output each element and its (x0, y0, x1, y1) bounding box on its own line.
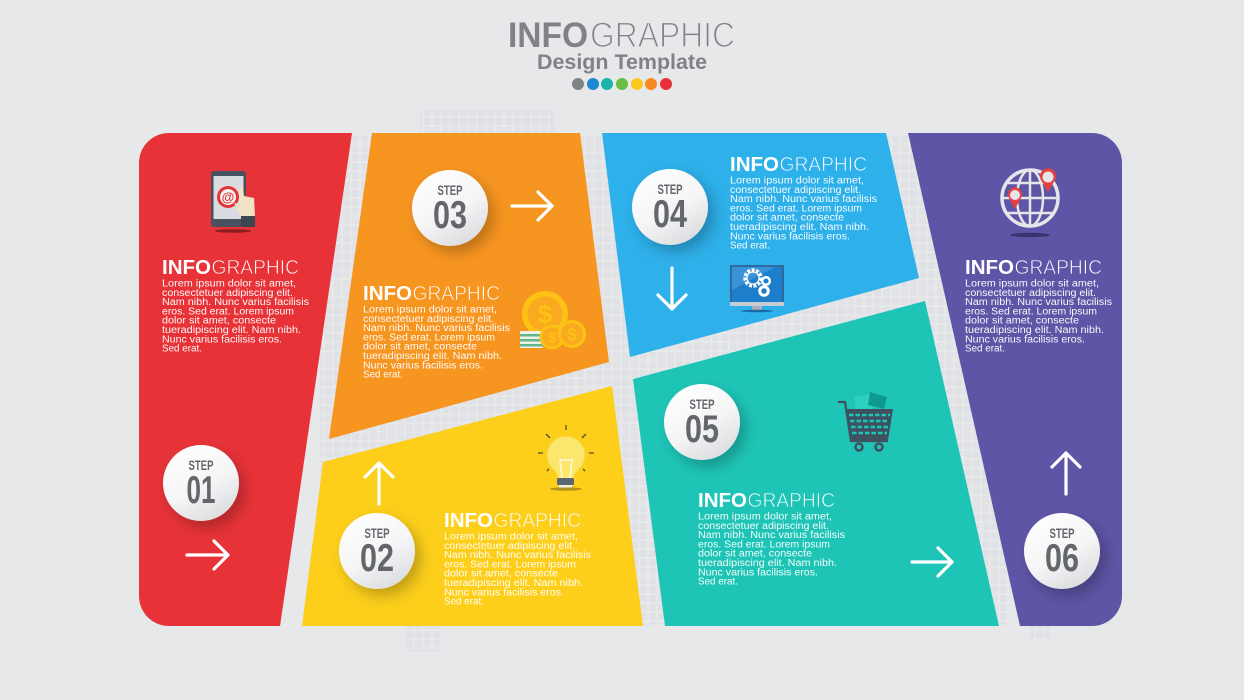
text block: INFO (162, 257, 211, 279)
text block: Sed erat. (363, 370, 403, 381)
icon: tablet with hand (211, 171, 255, 233)
text block: INFO (698, 490, 747, 512)
panel: step 1 red (139, 133, 352, 626)
text block: consectetuer adipiscing elit. (444, 541, 575, 552)
text block: Lorem ipsum dolor sit amet, (698, 512, 832, 522)
text block: dolor sit amet, consecte (698, 549, 812, 560)
text block: GRAPHIC (1014, 257, 1102, 279)
text block: tueradipiscing elit. Nam nibh. (965, 325, 1104, 336)
text block: consectetuer adipiscing elit. (730, 185, 861, 196)
panel: step 5 teal (633, 301, 999, 626)
arrow up (365, 463, 393, 504)
icon: monitor with gears (730, 265, 784, 312)
panel: step 4 blue (602, 133, 919, 357)
text block (363, 283, 510, 381)
text block: eros. Sed erat. Lorem ipsum (965, 306, 1097, 317)
icon: coins and cash: $ (538, 299, 553, 329)
text block: Lorem ipsum dolor sit amet, (363, 304, 497, 316)
panel: step 3 orange (329, 133, 609, 439)
text block: dolor sit amet, consecte (730, 213, 844, 224)
step badge 04: STEP (658, 181, 682, 197)
text block: Nunc varius facilisis eros. (698, 567, 818, 578)
text block: consectetuer adipiscing elit. (698, 521, 829, 532)
icon: shopping cart (838, 392, 893, 450)
text block: INFO (444, 510, 493, 532)
icon: coins and cash (520, 291, 586, 350)
subtitle: Design Template (537, 51, 707, 74)
text block: Nunc varius facilisis eros. (363, 360, 483, 371)
text block: dolor sit amet, consecte (444, 569, 558, 580)
step badge 01: 01 (186, 469, 216, 512)
step badge 01: STEP (188, 457, 214, 473)
text block (698, 490, 845, 588)
text block: GRAPHIC (412, 283, 500, 305)
step badge 02 (339, 513, 415, 589)
text block: INFO (730, 154, 779, 176)
icon: light bulb (538, 425, 594, 491)
step badge 02: 02 (360, 537, 394, 580)
panel: step 6 purple (908, 133, 1122, 626)
text block: eros. Sed erat. Lorem ipsum (162, 306, 294, 317)
text block: GRAPHIC (748, 490, 835, 512)
text block: consectetuer adipiscing elit. (363, 314, 494, 325)
step badge 04 (632, 169, 708, 245)
step badge 04: 04 (653, 193, 687, 236)
text block: tueradipiscing elit. Nam nibh. (698, 558, 837, 569)
arrow down (658, 268, 686, 309)
text block: Nunc varius facilisis eros. (730, 231, 850, 242)
text block: Nunc varius facilisis eros. (965, 334, 1085, 345)
text block: eros. Sed erat. Lorem ipsum (363, 332, 495, 343)
text block: Lorem ipsum dolor sit amet, (730, 176, 864, 186)
colour dots (572, 78, 672, 90)
text block: tueradipiscing elit. Nam nibh. (162, 325, 301, 336)
step badge 05 (664, 384, 740, 460)
step badge 03 (412, 170, 488, 246)
text block: Sed erat. (965, 344, 1005, 355)
text block: GRAPHIC (780, 154, 867, 176)
text block: Nam nibh. Nunc varius facilisis (363, 323, 510, 334)
text block: tueradipiscing elit. Nam nibh. (363, 351, 502, 362)
icon: coins and cash: $ (548, 330, 557, 346)
step badge 06: STEP (1050, 525, 1074, 541)
text block: Lorem ipsum dolor sit amet, (162, 278, 296, 290)
title: INFO (508, 16, 588, 55)
text block: Nam nibh. Nunc varius facilisis (698, 530, 845, 541)
step badge 03: STEP (438, 182, 462, 198)
text block (730, 154, 877, 252)
panel: step 2 yellow (302, 386, 643, 626)
icon: tablet with hand: @ (222, 190, 234, 204)
arrow up (1052, 453, 1080, 494)
step badge 06 (1024, 513, 1100, 589)
step badge 03: 03 (433, 194, 467, 237)
text block: Sed erat. (698, 577, 738, 588)
step badge 05: 05 (685, 408, 719, 451)
text block: eros. Sed erat. Lorem ipsum (698, 539, 830, 550)
text block: Lorem ipsum dolor sit amet, (965, 278, 1099, 290)
arrow right (187, 541, 228, 569)
text block: GRAPHIC (212, 257, 299, 279)
arrow right (912, 548, 952, 576)
text block: INFO (965, 257, 1014, 279)
text block: Nam nibh. Nunc varius facilisis (730, 194, 877, 205)
text block: Lorem ipsum dolor sit amet, (444, 532, 578, 542)
step badge 01 (163, 445, 239, 521)
text block: Sed erat. (162, 344, 202, 355)
text block: dolor sit amet, consecte (162, 316, 276, 327)
text block: eros. Sed erat. Lorem ipsum (730, 203, 862, 214)
title: GRAPHIC (590, 16, 735, 55)
text block: INFO (363, 283, 412, 305)
step badge 06: 06 (1045, 537, 1079, 580)
text block: Nunc varius facilisis eros. (444, 587, 564, 598)
text block: Sed erat. (730, 241, 770, 252)
icon: globe with pins (1002, 168, 1058, 237)
text block: Nam nibh. Nunc varius facilisis (444, 550, 591, 561)
text block (162, 257, 309, 355)
icon: coins and cash: $ (567, 325, 577, 344)
text block: consectetuer adipiscing elit. (965, 288, 1096, 299)
text block: consectetuer adipiscing elit. (162, 288, 293, 299)
step badge 05: STEP (690, 396, 714, 412)
text block (444, 510, 591, 608)
text block: dolor sit amet, consecte (363, 342, 477, 353)
text block: tueradipiscing elit. Nam nibh. (444, 578, 583, 589)
title (508, 16, 735, 55)
text block: tueradipiscing elit. Nam nibh. (730, 222, 869, 233)
text block: eros. Sed erat. Lorem ipsum (444, 559, 576, 570)
text block: GRAPHIC (494, 510, 581, 532)
arrow right (512, 192, 552, 220)
text block: dolor sit amet, consecte (965, 316, 1079, 327)
text block: Nam nibh. Nunc varius facilisis (965, 297, 1112, 308)
text block: Sed erat. (444, 597, 484, 608)
step badge 02: STEP (364, 525, 390, 541)
text block: Nam nibh. Nunc varius facilisis (162, 297, 309, 308)
text block: Nunc varius facilisis eros. (162, 334, 282, 345)
text block (965, 257, 1112, 355)
